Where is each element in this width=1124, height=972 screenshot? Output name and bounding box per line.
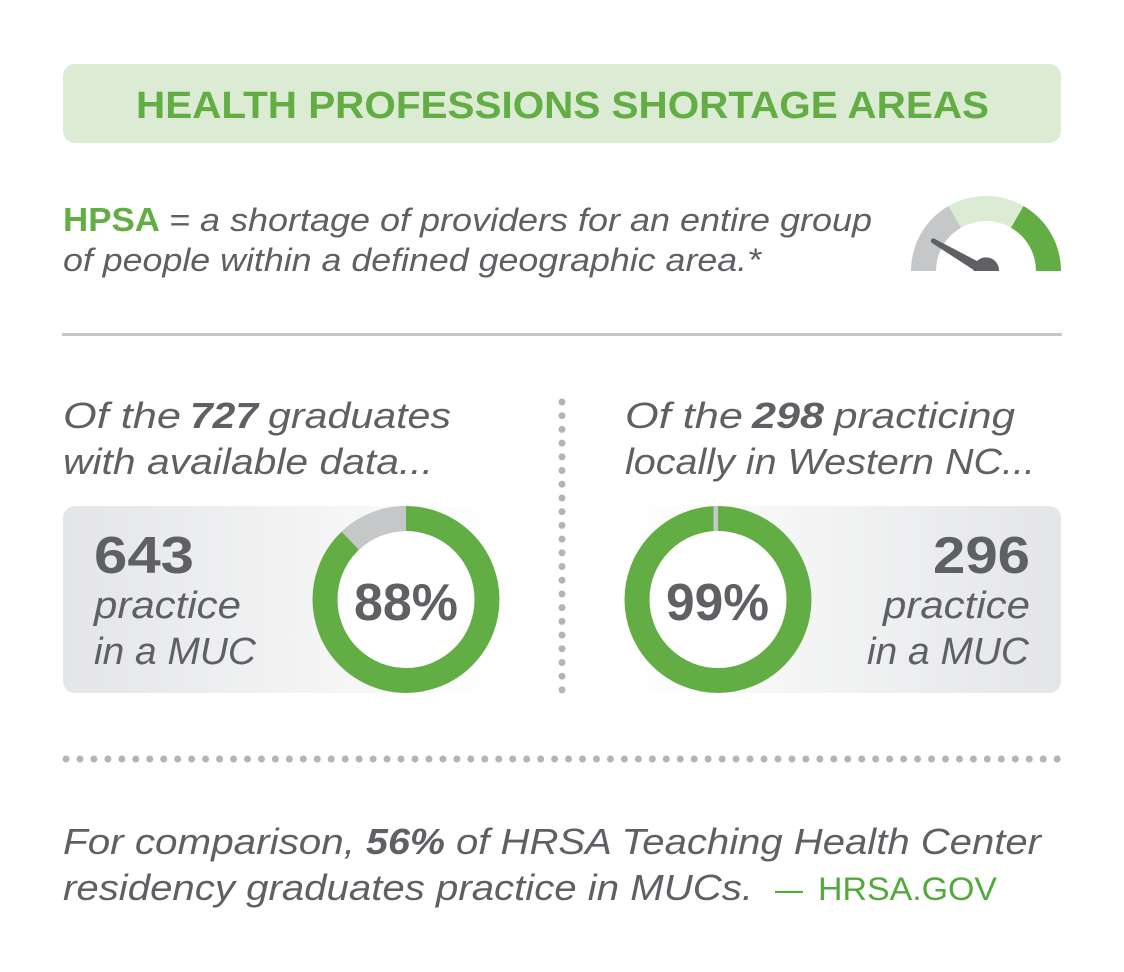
stat: 296 practice in a MUC: in a MUC (867, 631, 1030, 673)
stat: 643 practice in a MUC (93, 527, 257, 673)
stat: 296 practice in a MUC (867, 527, 1030, 673)
right heading: Of the (625, 395, 743, 436)
left heading (63, 395, 451, 482)
stat: 643 practice in a MUC: 643 (94, 527, 194, 585)
comparison text: of HRSA Teaching Health Center (456, 821, 1043, 862)
left heading: graduates (268, 395, 451, 436)
HPSA definition text: HPSA (63, 201, 160, 238)
panel: left stat with donut (63, 506, 499, 693)
donut chart: 88% (325, 506, 487, 680)
comparison text: residency graduates practice in MUCs. (63, 867, 753, 908)
HPSA definition text: = a shortage of providers for an entire group (169, 202, 872, 238)
horizontal dotted divider (66, 756, 1059, 762)
stat: 296 practice in a MUC: 296 (933, 527, 1030, 585)
donut chart: 99%: 99% (666, 574, 769, 632)
stat: 643 practice in a MUC: practice (93, 585, 241, 627)
comparison text: For comparison, (63, 821, 355, 862)
panel: right stat with donut (625, 506, 1061, 693)
stat: 643 practice in a MUC: in a MUC (94, 631, 257, 673)
divider (62, 333, 1062, 336)
HPSA definition text: of people within a defined geographic area.* (63, 242, 763, 278)
comparison text (63, 821, 1043, 908)
icon: gauge (911, 196, 1061, 271)
comparison text: 56% (366, 821, 445, 862)
right heading: 298 (751, 395, 824, 436)
donut chart: 99% (637, 506, 799, 680)
right heading: practicing (833, 395, 1015, 436)
stat: 296 practice in a MUC: practice (882, 585, 1030, 627)
title banner (63, 64, 1061, 143)
donut chart: 88%: 88% (354, 574, 458, 632)
right heading (625, 395, 1035, 482)
title banner: HEALTH PROFESSIONS SHORTAGE AREAS (136, 85, 989, 127)
right heading: locally in Western NC... (625, 441, 1035, 482)
left heading: with available data... (63, 441, 433, 482)
left heading: 727 (190, 395, 260, 436)
left heading: Of the (63, 395, 181, 436)
source: HRSA.GOV: HRSA.GOV (818, 871, 998, 907)
source: HRSA.GOV: — (775, 871, 803, 907)
vertical dotted divider (558, 402, 566, 690)
HPSA definition text (63, 201, 872, 278)
